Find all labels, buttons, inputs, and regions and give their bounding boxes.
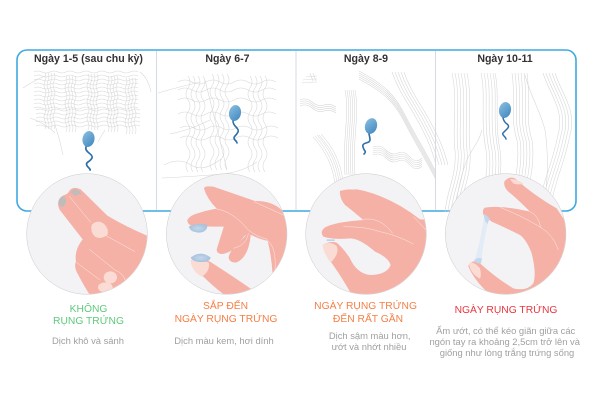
- panel: day 6-7 mucus texture: [158, 74, 278, 178]
- label: approaching ovulation: SẮP ĐẾN: [203, 299, 248, 312]
- text: stretchy egg white description: ngón tay ra khoảng 2,5cm trở lên và: [429, 336, 581, 347]
- icon: sperm day 8-9: [363, 117, 379, 154]
- text: darker, wet and slimy: ướt và nhớt nhiều: [332, 341, 406, 352]
- text: darker, wet and slimy: Dịch sậm màu hơn,: [329, 330, 411, 341]
- panel: day 8-9 mucus texture: [300, 71, 448, 185]
- icon: sperm day 6-7: [228, 104, 242, 143]
- text: stretchy egg white description: Ẩm ướt, có thể kéo giãn giữa các: [436, 325, 576, 336]
- label: ovulation day: NGÀY RỤNG TRỨNG: [455, 303, 557, 316]
- label: not ovulating: RỤNG TRỨNG: [53, 314, 124, 327]
- circle: dry fingers: [26, 174, 148, 294]
- icon: sperm day 10-11: [498, 101, 512, 139]
- heading: day 6-7: Ngày 6-7: [205, 53, 250, 65]
- label: very close to ovulation: NGÀY RỤNG TRỨNG: [314, 299, 417, 312]
- panel: day 1-5 mucus texture: [23, 71, 151, 155]
- calendar panel frame: [17, 50, 576, 211]
- heading: day 1-5: Ngày 1-5 (sau chu kỳ): [34, 53, 143, 65]
- label: not ovulating: KHÔNG: [70, 302, 107, 315]
- label: approaching ovulation: NGÀY RỤNG TRỨNG: [175, 312, 277, 325]
- circle: egg-white mucus stretching fingers: [445, 173, 566, 294]
- icon: sperm day 1-5: [81, 130, 96, 170]
- text: cream colored, slightly sticky: Dịch màu kem, hơi dính: [174, 335, 274, 346]
- circle: sticky mucus fingers: [306, 174, 426, 294]
- text: stretchy egg white description: giống như lòng trắng trứng sống: [440, 347, 574, 358]
- text: dry and sticky: Dịch khô và sánh: [52, 335, 124, 346]
- heading: day 10-11: Ngày 10-11: [477, 53, 533, 65]
- label: very close to ovulation: ĐẾN RẤT GẦN: [333, 312, 403, 325]
- panel: day 10-11 mucus texture: [445, 73, 572, 212]
- circle: creamy mucus fingers: [166, 174, 291, 297]
- heading: day 8-9: Ngày 8-9: [344, 53, 388, 65]
